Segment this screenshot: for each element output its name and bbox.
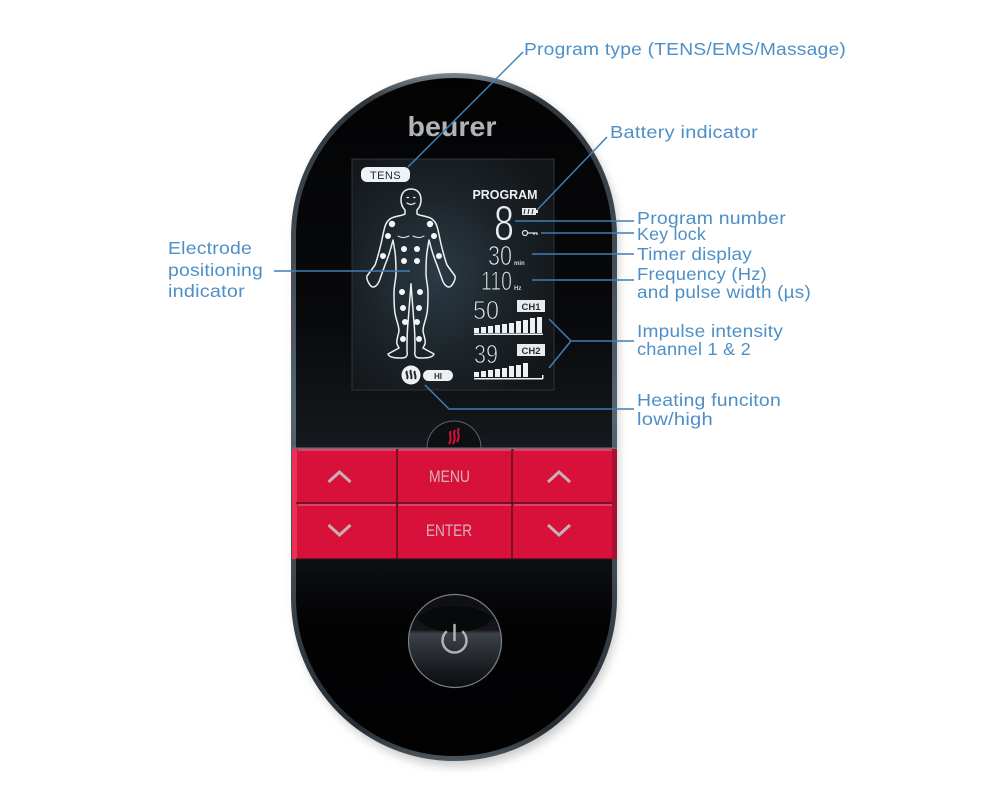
control buttons (292, 448, 617, 559)
channel 1 intensity (473, 295, 545, 335)
label: impulse intensity: channel 1 & 2 (637, 339, 751, 359)
line: timer (532, 253, 634, 255)
power button (408, 594, 502, 688)
device body (291, 73, 618, 766)
label: impulse intensity (637, 321, 783, 359)
LCD screen (352, 159, 554, 390)
channel 2 intensity: 39 (474, 339, 498, 369)
label: key lock: Key lock (637, 224, 706, 244)
label: heating function: low/high (637, 409, 713, 429)
label: impulse intensity: Impulse intensity (637, 321, 783, 341)
line: battery (537, 137, 607, 210)
button: enter: ENTER (426, 522, 472, 540)
battery icon (522, 208, 538, 215)
leader lines (274, 52, 634, 409)
line: program type (408, 52, 523, 167)
button: up right (548, 472, 570, 482)
line: key lock (541, 232, 634, 234)
line: program number (515, 220, 634, 222)
label: program number: Program number (637, 208, 786, 228)
label: electrode positioning: Electrode (168, 238, 252, 258)
label: program type: Program type (TENS/EMS/Massage) (524, 39, 846, 59)
channel 2 intensity: CH2 (521, 346, 541, 357)
body figure with electrode points (367, 189, 455, 358)
button: down right (548, 525, 570, 535)
program digit: 8 (494, 197, 514, 251)
label: heating function (637, 390, 781, 429)
line: electrode (274, 270, 410, 272)
label: electrode positioning: positioning (168, 260, 263, 280)
label: electrode positioning (168, 238, 263, 301)
brand logo: beurer (408, 111, 497, 142)
label: frequency and pulse width (637, 264, 811, 302)
HI badge: HI (434, 372, 442, 381)
line: impulse intensity (549, 319, 634, 368)
button: down left (328, 525, 350, 535)
label: battery indicator: Battery indicator (610, 122, 758, 142)
channel 1 intensity: 50 (473, 295, 499, 325)
TENS badge: TENS (370, 170, 401, 182)
LCD screen: min (514, 261, 525, 267)
heat button (427, 421, 481, 448)
label: electrode positioning: indicator (168, 281, 245, 301)
label: timer display: Timer display (637, 244, 752, 264)
LCD screen: Hz (514, 286, 521, 292)
channel 2 intensity (474, 339, 545, 380)
line: heating (425, 385, 634, 409)
timer digits: 30 (488, 240, 512, 271)
frequency digits: 110 (481, 266, 512, 296)
HI badge (423, 370, 453, 381)
button: menu: MENU (429, 468, 470, 486)
key icon (522, 230, 537, 236)
TENS badge (361, 167, 410, 182)
channel 1 intensity: CH1 (521, 302, 541, 313)
program heading: PROGRAM (472, 188, 538, 202)
line: frequency (532, 279, 634, 281)
heating icon (402, 366, 420, 384)
button: up left (328, 472, 350, 482)
label: frequency and pulse width: Frequency (Hz) (637, 264, 767, 284)
label: heating function: Heating funciton (637, 390, 781, 410)
label: frequency and pulse width: and pulse width (µs) (637, 282, 811, 302)
